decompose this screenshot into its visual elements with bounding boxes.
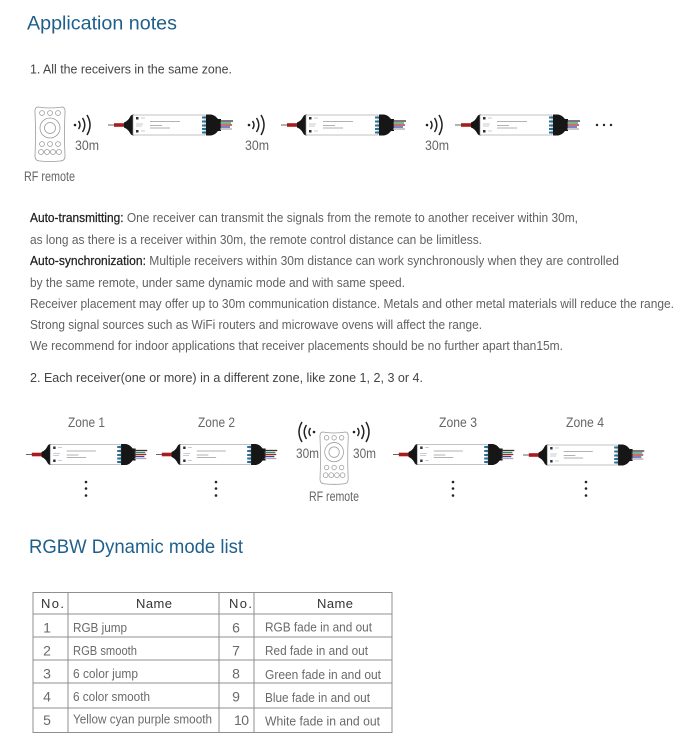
heading: note 2: 2. Each receiver(one or more) in a different zone, like zone 1, 2, 3 or 4. <box>30 370 423 385</box>
row 5: 10 <box>234 712 249 728</box>
icon: signal waves right <box>353 422 369 442</box>
row 4: Blue fade in and out <box>265 690 370 705</box>
icon: RF remote centre <box>320 432 348 484</box>
dots zone 3 <box>452 481 454 497</box>
row 2: 2 <box>43 642 51 658</box>
row 1: 1 <box>43 620 51 636</box>
label: Zone 4: Zone 4 <box>566 415 604 430</box>
receiver zone 1 <box>26 444 147 465</box>
receiver zone 4 <box>523 444 644 466</box>
heading: note 1: 1. All the receivers in the same zone. <box>30 62 232 76</box>
row 3: 6 color jump <box>73 666 138 681</box>
continuation dots <box>596 124 612 126</box>
line: auto-transmitting: Auto-transmitting: One receiver can transmit the signals from the remote to another receiver within 30m, <box>30 210 578 225</box>
line: strong signal sources: Strong signal sources such as WiFi routers and microwave ovens will affect the range. <box>30 317 482 332</box>
label: Zone 2: Zone 2 <box>198 415 235 430</box>
receiver 2 <box>281 114 406 136</box>
label: RF remote centre: RF remote <box>309 489 359 504</box>
row 5 <box>43 712 380 728</box>
row 3 <box>43 666 381 682</box>
row 1: RGB jump <box>73 620 127 635</box>
icon: signal waves left <box>299 422 315 442</box>
table: dynamic modes <box>33 592 392 732</box>
table header <box>41 596 353 611</box>
label: Zone 3: Zone 3 <box>439 415 477 430</box>
label: 30m left: 30m <box>296 446 319 461</box>
label: 30m second: 30m <box>245 138 269 153</box>
row 1 <box>43 620 372 636</box>
receiver 3 <box>455 114 580 136</box>
line: same remote: by the same remote, under same dynamic mode and with same speed. <box>30 275 405 290</box>
row 4: 6 color smooth <box>73 689 150 704</box>
label: Zone 1: Zone 1 <box>68 415 105 430</box>
row 3: 8 <box>232 666 240 682</box>
heading: RGBW Dynamic mode list: RGBW Dynamic mode list <box>29 536 244 558</box>
receiver zone 2 <box>156 444 277 465</box>
icon: signal waves 2 <box>248 115 264 135</box>
row 5: Yellow cyan purple smooth <box>73 712 212 726</box>
row 4: 9 <box>232 688 240 704</box>
row 2: 7 <box>232 642 240 658</box>
dots zone 2 <box>215 481 217 497</box>
line: distance limitless: as long as there is a receiver within 30m, the remote control distance can be limitless. <box>30 232 482 247</box>
row 1: RGB fade in and out <box>265 620 372 634</box>
dots zone 4 <box>585 481 587 497</box>
row 3: 3 <box>43 666 51 682</box>
title: Application notes: Application notes <box>27 12 177 34</box>
row 1: 6 <box>232 620 240 636</box>
dots zone 1 <box>85 481 87 497</box>
label: RF remote: RF remote <box>24 169 75 184</box>
icon: signal waves 3 <box>426 115 442 135</box>
line: auto-synchronization: Auto-synchronization: Multiple receivers within 30m distance can work synchronously when they are controlled <box>30 253 619 268</box>
table header: Name <box>317 596 353 611</box>
row 2 <box>43 642 368 658</box>
diagram: receivers in different zones <box>26 415 644 504</box>
row 4 <box>43 688 370 705</box>
row 5: White fade in and out <box>265 714 380 728</box>
receiver zone 3 <box>393 444 514 465</box>
table header: No. <box>229 596 252 611</box>
icon: signal waves 1 <box>74 115 90 135</box>
receiver 1 <box>108 114 233 136</box>
row 2: Red fade in and out <box>265 643 368 658</box>
icon: RF remote <box>35 107 65 162</box>
row 2: RGB smooth <box>73 643 137 658</box>
line: recommendation: We recommend for indoor applications that receiver placements should be no further apart than15m. <box>30 338 563 353</box>
row 3: Green fade in and out <box>265 667 381 682</box>
text block: explanation <box>30 210 674 353</box>
label: 30m first: 30m <box>75 138 99 153</box>
table header: No. <box>41 596 64 611</box>
diagram: receivers in the same zone <box>24 107 612 184</box>
row 5: 5 <box>43 712 51 728</box>
row 4: 4 <box>43 688 51 704</box>
label: 30m right: 30m <box>353 446 376 461</box>
label: 30m third: 30m <box>425 138 449 153</box>
table header: Name <box>136 596 172 611</box>
